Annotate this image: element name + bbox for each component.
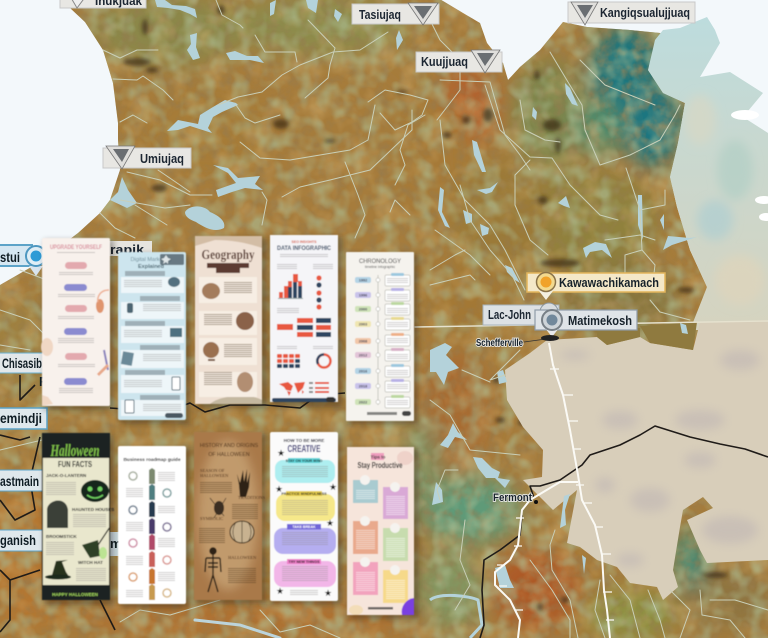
tip icons bbox=[360, 475, 400, 575]
tip tags: PRACTICE MINDFULNESS bbox=[281, 492, 327, 496]
heading: Stay Productive bbox=[358, 461, 403, 470]
decorative peach blobs bbox=[41, 290, 109, 406]
label: settlement fragment: F bbox=[39, 374, 47, 389]
heading: Business roadmap guide bbox=[123, 457, 181, 463]
step text bbox=[126, 472, 175, 598]
heading bbox=[358, 453, 403, 470]
label: fragment between cards: m bbox=[110, 536, 122, 551]
tip tags: STAY ON YOUR MIND bbox=[286, 459, 323, 463]
spider bbox=[210, 498, 226, 518]
year pills bbox=[355, 277, 371, 405]
subheading bbox=[207, 263, 249, 273]
map: pale Labrador region bbox=[505, 320, 768, 600]
donut chart bbox=[317, 354, 330, 368]
stars: ★ bbox=[329, 482, 337, 492]
tip tags: TRY NEW THINGS bbox=[289, 560, 320, 564]
fact: witch hat: WITCH HAT bbox=[78, 560, 103, 565]
tip tags bbox=[281, 458, 327, 564]
label: Kuujjuarapik (partly hidden): rapik bbox=[110, 242, 145, 257]
label: Chisasibi (cropped) bbox=[0, 353, 44, 373]
stars: ★ bbox=[324, 588, 332, 598]
heading: SEO INSIGHTS bbox=[292, 240, 317, 244]
skeleton bbox=[205, 548, 221, 592]
label: Matimekosh: Matimekosh bbox=[568, 313, 632, 328]
label: Chisasibi (cropped): Chisasib bbox=[2, 355, 42, 371]
step circles bbox=[129, 472, 171, 597]
dot list bbox=[316, 275, 322, 310]
text blocks: HALLOWEEN bbox=[228, 555, 257, 560]
steps bbox=[58, 262, 95, 393]
map: railway bbox=[495, 343, 614, 638]
heading: Explained bbox=[138, 264, 164, 270]
year pills: 2008 bbox=[359, 340, 367, 344]
heading: UPGRADE YOURSELF bbox=[50, 245, 102, 251]
fact: broomstick bbox=[46, 527, 110, 559]
label: Kawawachikamach bbox=[527, 272, 665, 300]
map: dark vegetation patches bbox=[123, 5, 728, 611]
card: Data Infographic: DATA INFOGRAPHIC bbox=[277, 245, 331, 252]
fact: broomstick: BROOMSTICK bbox=[46, 534, 77, 539]
stars: ★ bbox=[277, 448, 285, 458]
year pills: 1996 bbox=[359, 294, 367, 298]
heading: HISTORY AND ORIGINS bbox=[200, 443, 259, 449]
map: lavender mottling on pale region bbox=[560, 350, 760, 567]
panel icons bbox=[202, 283, 254, 392]
label: fragment between cards bbox=[108, 532, 122, 556]
heading: Tips to bbox=[371, 454, 386, 460]
card: Business roadmap guide bbox=[118, 446, 186, 604]
year pills: 2022 bbox=[359, 400, 367, 404]
year pills: 2012 bbox=[359, 354, 367, 358]
map: roads bbox=[0, 375, 768, 638]
label: Schefferville: Schefferville bbox=[476, 337, 523, 349]
label: Tasiujaq bbox=[352, 3, 439, 25]
heading: Digital Marketing bbox=[131, 257, 171, 263]
label: Kangiqsualujjuaq bbox=[568, 2, 695, 25]
label: Inukjuak bbox=[60, 0, 146, 8]
event tags bbox=[387, 273, 408, 406]
hand bbox=[237, 469, 250, 497]
label: Waskaganish (cropped): ganish bbox=[0, 532, 36, 548]
label: Umiujaq: Umiujaq bbox=[140, 151, 184, 166]
label: Tasiujaq: Tasiujaq bbox=[359, 7, 401, 22]
timeline bbox=[377, 275, 379, 405]
panels bbox=[199, 277, 257, 397]
card: Geography bbox=[195, 236, 262, 404]
card: Digital Marketing Explained bbox=[118, 252, 186, 420]
label: Whapmagoostui (cropped): stui bbox=[0, 249, 20, 265]
card: Halloween Fun Facts bbox=[42, 433, 114, 600]
tip tags: TAKE BREAK bbox=[292, 525, 316, 529]
label: Lac-John: Lac-John bbox=[488, 307, 531, 322]
map: land fragments over pale region bbox=[597, 322, 697, 350]
heading: OF HALLOWEEN bbox=[208, 452, 250, 458]
highlighted blocks bbox=[277, 318, 331, 337]
bar chart bbox=[278, 274, 303, 299]
card: How to be more Creative: CREATIVE bbox=[288, 444, 321, 455]
sections bbox=[121, 271, 184, 416]
roadmap tags bbox=[149, 468, 155, 600]
stars bbox=[275, 448, 337, 598]
world map bbox=[279, 382, 305, 396]
footer bbox=[272, 397, 336, 402]
footer bbox=[290, 590, 318, 595]
heading bbox=[200, 443, 259, 458]
label: Kuujjuaq: Kuujjuaq bbox=[421, 54, 468, 69]
label: Fermont: Fermont bbox=[493, 492, 532, 504]
stars: ★ bbox=[326, 518, 334, 528]
label: Whapmagoostui (cropped) bbox=[0, 245, 46, 276]
text blocks bbox=[199, 468, 265, 584]
year pills: 2003 bbox=[359, 322, 367, 326]
label: Matimekosh bbox=[535, 310, 637, 337]
heading: CHRONOLOGY bbox=[359, 258, 402, 265]
map: small pale patches on north-east region bbox=[731, 110, 768, 221]
footer: HAPPY HALLOWEEN bbox=[52, 592, 98, 597]
year pills: 1992 bbox=[359, 278, 367, 282]
stars: ★ bbox=[275, 484, 283, 494]
text blocks: SEASON OF bbox=[200, 468, 225, 473]
year pills: 2018 bbox=[359, 384, 367, 388]
card shadows bbox=[44, 237, 419, 619]
label: Umiujaq bbox=[103, 146, 191, 169]
label: Kangiqsualujjuaq: Kangiqsualujjuaq bbox=[600, 5, 690, 20]
label: Kawawachikamach: Kawawachikamach bbox=[559, 276, 659, 290]
heading bbox=[131, 257, 171, 270]
fact: haunted houses bbox=[47, 501, 114, 528]
text blocks: SYMBOLIC bbox=[200, 516, 223, 521]
card: How to be more Creative bbox=[270, 432, 338, 601]
label: Kuujjuaq bbox=[416, 50, 502, 73]
label: Lac-John bbox=[483, 303, 559, 325]
text blocks: TRADITIONS bbox=[238, 495, 265, 500]
card: Upgrade Yourself bbox=[41, 238, 110, 406]
legend bbox=[309, 382, 329, 393]
waffle chart bbox=[277, 354, 300, 368]
year pills: 2016 bbox=[359, 370, 367, 374]
text blocks: HALLOWEEN bbox=[200, 473, 229, 478]
fact: jack-o-lantern bbox=[46, 473, 109, 502]
card: History and origins of Halloween bbox=[194, 432, 265, 600]
heading: HOW TO BE MORE bbox=[284, 438, 324, 443]
label: Wemindji (cropped): emindji bbox=[0, 410, 42, 426]
badge bbox=[160, 254, 184, 265]
fact: jack-o-lantern: JACK-O-LANTERN bbox=[46, 473, 86, 478]
fact: haunted houses: HAUNTED HOUSES bbox=[72, 507, 114, 512]
pumpkin bbox=[230, 521, 254, 543]
card: Chronology: timeline infographic bbox=[365, 265, 395, 269]
tip text bbox=[356, 489, 405, 600]
card: Halloween Fun Facts: FUN FACTS bbox=[58, 460, 92, 469]
heading: Halloween bbox=[50, 441, 100, 460]
footer bbox=[367, 411, 411, 416]
label: Kuujjuarapik (partly hidden) bbox=[106, 241, 152, 257]
card: Tips to Stay Productive bbox=[347, 447, 414, 615]
tip text bbox=[282, 466, 328, 582]
tip blobs bbox=[274, 460, 336, 587]
fact: witch hat bbox=[45, 560, 106, 581]
map: pale north-east region bbox=[640, 10, 768, 335]
panel text bbox=[204, 282, 252, 385]
map: lakes bbox=[110, 0, 697, 638]
card: Data Infographic bbox=[270, 235, 338, 402]
label: Eastmain (cropped) bbox=[0, 470, 43, 491]
tip boxes bbox=[353, 480, 408, 603]
card: Chronology bbox=[346, 252, 414, 421]
stars: ★ bbox=[276, 586, 284, 596]
label: Schefferville bbox=[476, 335, 559, 349]
footer bbox=[368, 598, 414, 615]
heading: Geography bbox=[202, 247, 255, 262]
label: Eastmain (cropped): astmain bbox=[0, 473, 39, 489]
year pills: 2000 bbox=[359, 308, 367, 312]
